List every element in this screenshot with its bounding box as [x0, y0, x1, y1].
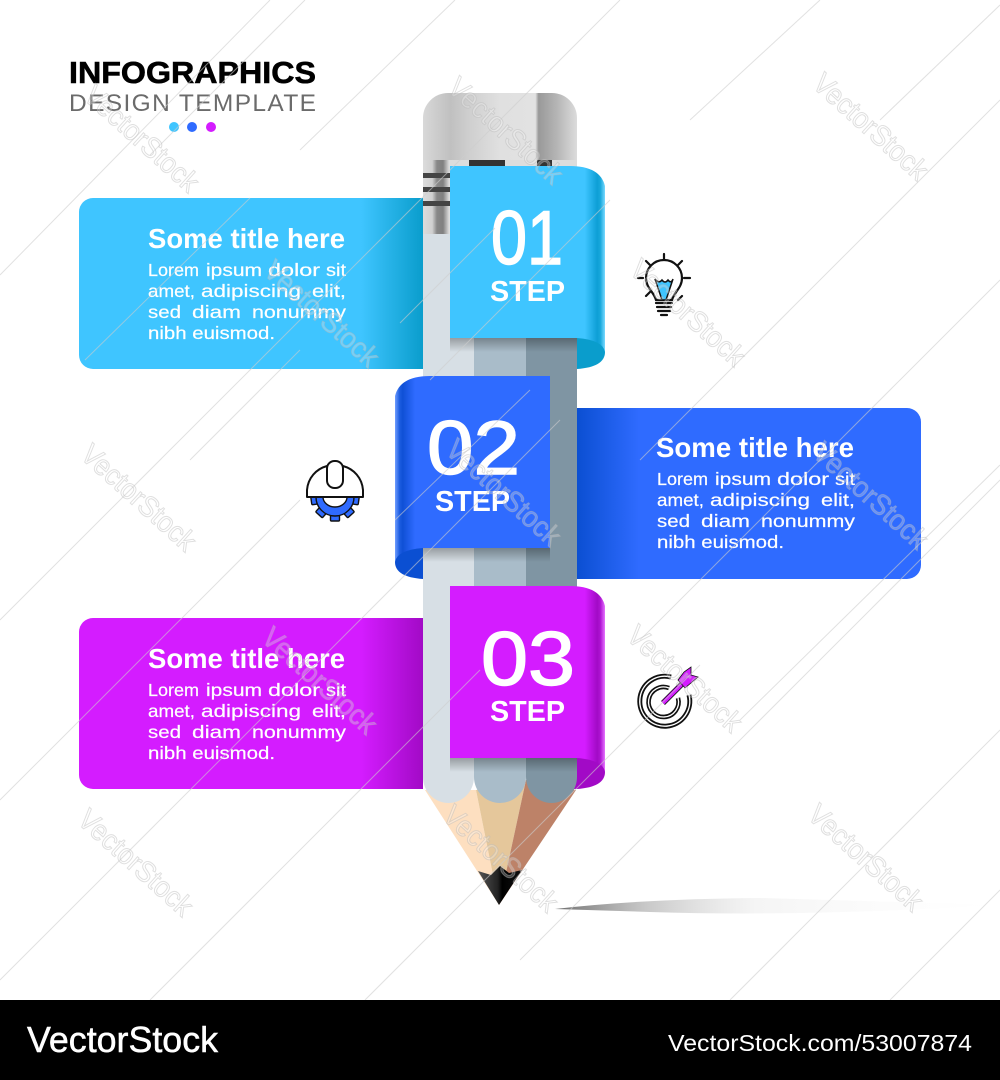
text block 2: ipsum: [715, 469, 771, 489]
ribbon 3 back panel: [79, 618, 605, 789]
ribbon 2 front square: [395, 376, 550, 562]
text block 3: amet,: [148, 701, 195, 721]
text block 2: sed: [657, 511, 690, 531]
pencil body: [423, 200, 577, 803]
text block 1: nibh euismod.: [148, 323, 275, 343]
ribbon 1 front square: [450, 166, 605, 352]
watermarks: VectorStock: [77, 79, 205, 199]
watermarks: VectorStock: [806, 436, 934, 556]
watermarks: VectorStock: [439, 433, 567, 553]
number 01: 01: [491, 196, 563, 281]
ribbon 2 back panel: [395, 408, 921, 579]
watermarks: VectorStock: [801, 798, 929, 918]
text block 2: [656, 432, 855, 552]
text block 2: dolor: [777, 469, 829, 489]
text block 3: Lorem: [148, 680, 199, 700]
text block 2: Some title here: [656, 432, 854, 463]
text block 3: Some title here: [148, 643, 345, 674]
watermarks: VectorStock: [436, 799, 564, 919]
pencil metal band: [423, 160, 577, 234]
text block 1: sit: [326, 260, 346, 280]
text block 1: Some title here: [148, 223, 345, 254]
text block 3: adipiscing: [201, 701, 301, 721]
text block 2: nonummy: [761, 511, 855, 531]
text block 1: nonummy: [252, 302, 346, 322]
text block 3: sed: [148, 722, 181, 742]
text block 3: [148, 643, 346, 763]
step label 1: STEP: [490, 276, 565, 308]
watermarks: VectorStock: [620, 619, 748, 739]
gear: [311, 494, 359, 521]
title: INFOGRAPHICS: [69, 55, 316, 90]
text block 1: adipiscing: [201, 281, 301, 301]
footer bar: [0, 1000, 1000, 1080]
ground shadow: [555, 898, 1000, 913]
step label 2: STEP: [435, 486, 510, 518]
pencil wood tip: [425, 780, 576, 905]
text block 3: ipsum: [206, 680, 262, 700]
text block 1: diam: [192, 302, 241, 322]
pencil eraser: [423, 93, 577, 160]
icon: light bulb: [638, 254, 690, 315]
number 03: 03: [481, 617, 575, 702]
text block 3: diam: [192, 722, 241, 742]
text block 1: dolor: [268, 260, 320, 280]
ribbon 3 front square: [450, 586, 605, 772]
number 02: 02: [427, 406, 520, 491]
step label 3: STEP: [490, 696, 565, 728]
ribbon 1 back panel: [79, 198, 605, 369]
text block 1: elit,: [312, 281, 346, 301]
text block 2: sit: [835, 469, 855, 489]
text block 1: [148, 223, 346, 343]
text block 2: amet,: [657, 490, 704, 510]
decorative dots: [169, 122, 216, 132]
pencil lead: [478, 866, 522, 905]
text block 3: sit: [326, 680, 346, 700]
text block 2: adipiscing: [710, 490, 810, 510]
text block 2: elit,: [821, 490, 855, 510]
text block 3: nonummy: [252, 722, 346, 742]
watermarks: VectorStock: [255, 621, 383, 741]
watermarks: VectorStock: [441, 71, 569, 191]
watermarks: VectorStock: [806, 67, 934, 187]
text block 2: nibh euismod.: [657, 532, 784, 552]
watermarks: VectorStock: [71, 803, 199, 923]
footer image id: VectorStock.com/53007874: [668, 1030, 972, 1056]
text block 1: sed: [148, 302, 181, 322]
text block 1: Lorem: [148, 260, 199, 280]
icon: hard hat with gear: [307, 461, 363, 521]
watermarks: VectorStock: [257, 254, 385, 374]
watermarks: VectorStock: [623, 253, 751, 373]
watermarks: VectorStock: [74, 438, 202, 558]
text block 2: Lorem: [657, 469, 708, 489]
subtitle: DESIGN TEMPLATE: [69, 90, 316, 117]
text block 3: nibh euismod.: [148, 743, 275, 763]
text block 2: diam: [701, 511, 750, 531]
text block 3: elit,: [312, 701, 346, 721]
icon: target with arrow: [640, 667, 698, 726]
footer logo: VectorStock: [27, 1019, 219, 1060]
text block 3: dolor: [268, 680, 320, 700]
title: [69, 55, 316, 117]
watermarks: [71, 67, 934, 923]
text block 1: ipsum: [206, 260, 262, 280]
pencil: [423, 93, 577, 905]
text block 1: amet,: [148, 281, 195, 301]
